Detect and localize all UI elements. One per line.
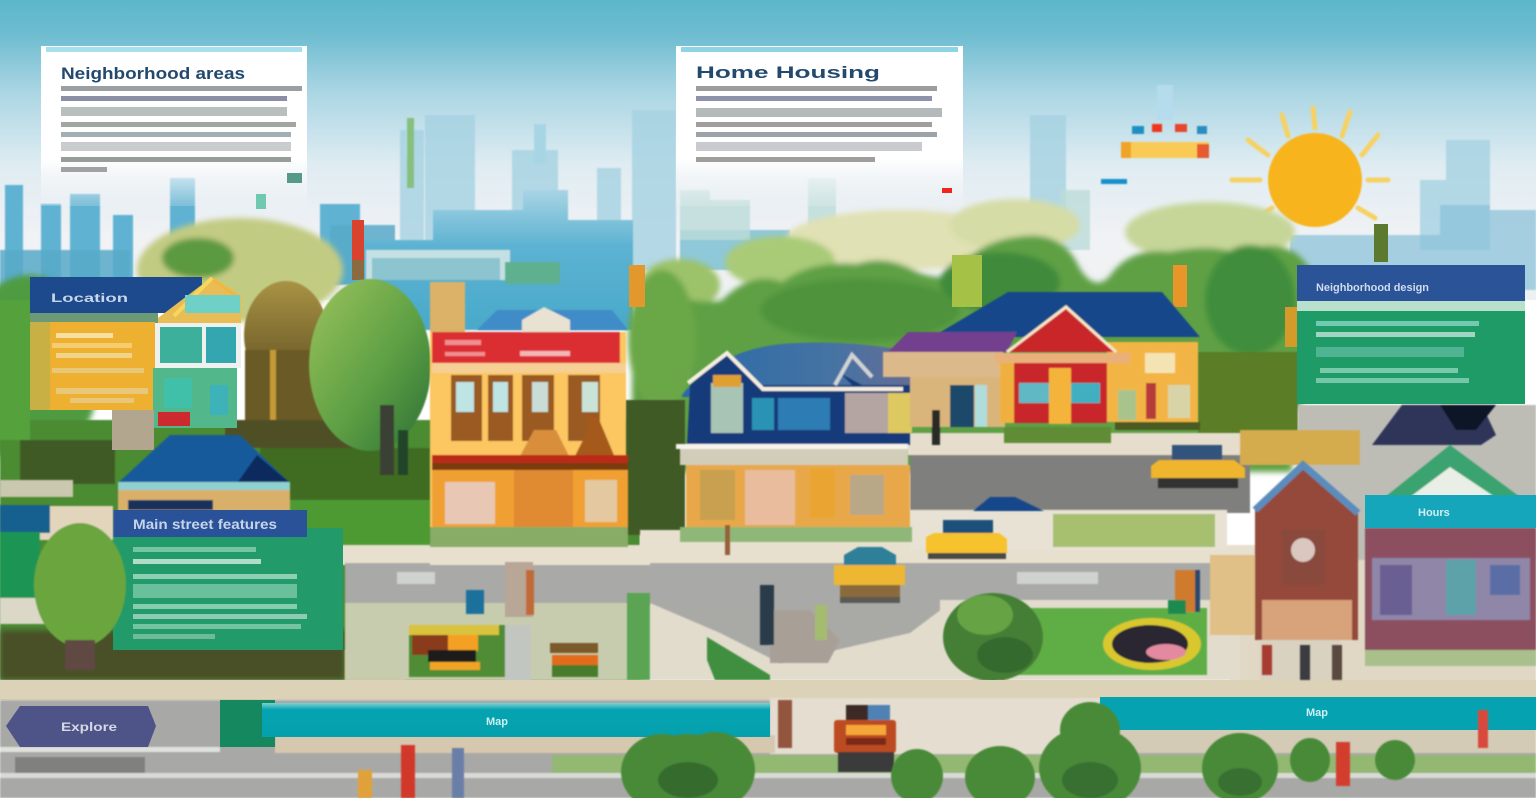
- orange car: [834, 705, 896, 772]
- pill label: [6, 706, 156, 747]
- pill label: Explore: [61, 720, 117, 734]
- tree: right foreground at left lawn: [309, 279, 431, 475]
- tree and lawn, right center: [943, 570, 1207, 700]
- heading: Home Housing: [696, 63, 880, 82]
- teal banner left: [220, 700, 770, 747]
- teal banner left: Map: [486, 716, 508, 728]
- tree: brown: [244, 281, 328, 422]
- green canopy: [632, 236, 1322, 472]
- street and plaza: [340, 405, 1536, 685]
- hazy tree tops: [785, 210, 1015, 270]
- panel: yellow card: [30, 277, 202, 410]
- panel: yellow card: Location: [51, 291, 128, 305]
- house: left with yellow card: [30, 277, 241, 450]
- sun: [1232, 108, 1388, 227]
- building: right teal card shop: [1365, 405, 1536, 666]
- panel: right green card: [1297, 265, 1525, 404]
- car: yellow lower: [834, 547, 905, 603]
- panel: green lower-left card: [113, 510, 343, 650]
- house: lower left roof: [118, 435, 290, 512]
- park bed: [409, 593, 650, 680]
- teal sign over shop: Hours: [1418, 507, 1450, 519]
- heading: Neighborhood areas: [61, 64, 245, 83]
- icon: small floating kites: [1101, 85, 1209, 184]
- car: yellow upper: [1151, 445, 1245, 488]
- building: brown house: [1210, 465, 1358, 685]
- building: red storefront: [430, 282, 628, 547]
- panel: right green card: Neighborhood design: [1316, 282, 1429, 294]
- teal sign over shop: [1365, 495, 1536, 528]
- left edge tree and signs: [0, 480, 126, 670]
- sidewalk strip: [0, 680, 1536, 700]
- park and people: [409, 562, 840, 693]
- road cars: [834, 445, 1245, 603]
- street trees: [621, 702, 1415, 798]
- ground: lawn: [0, 300, 1298, 680]
- people on street: [358, 645, 1488, 798]
- lower road: [0, 698, 1536, 798]
- panel: neighborhood text card: [41, 46, 307, 209]
- house: center blue: [676, 343, 932, 555]
- panel: green lower-left card: Main street features: [133, 516, 277, 532]
- car: navy: [973, 497, 1044, 511]
- panel: housing text card: [676, 46, 963, 206]
- skyline: [0, 110, 1536, 330]
- teal banner right: Map: [1306, 707, 1328, 719]
- car: yellow middle: [926, 520, 1007, 559]
- house: right red gable: [883, 292, 1200, 445]
- teal banner right: [1100, 697, 1536, 730]
- sky background: [0, 0, 1536, 300]
- trees background: [0, 199, 1388, 472]
